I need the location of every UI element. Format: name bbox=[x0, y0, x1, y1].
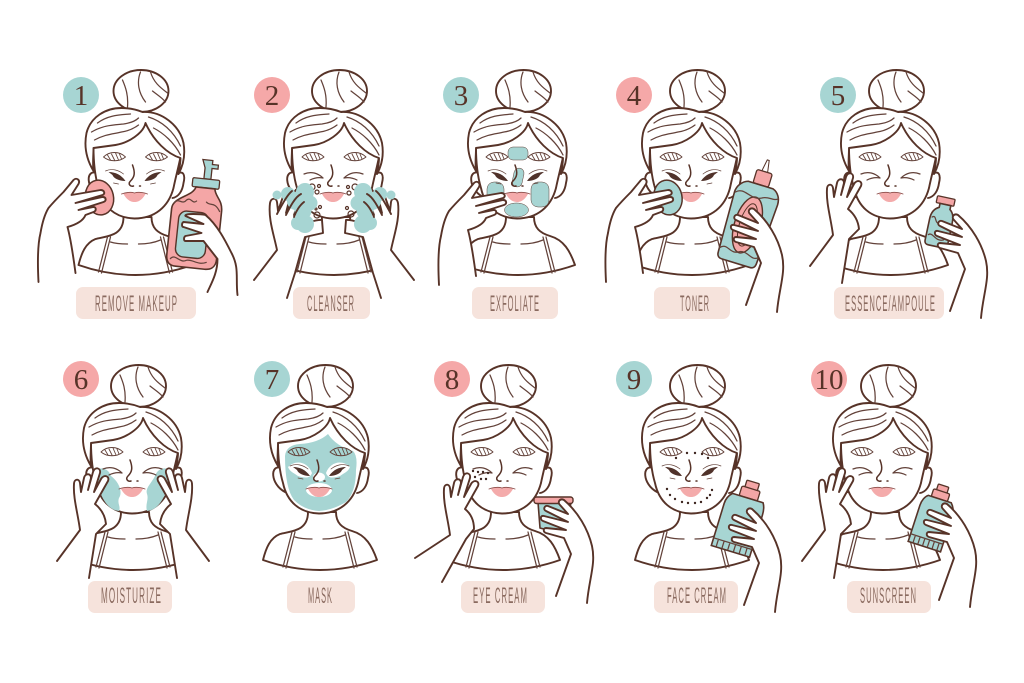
figure: woman applying moisturizer with both hands bbox=[57, 365, 209, 578]
number badge 1: 1 bbox=[74, 80, 88, 112]
step 10: sunscreen: SUNSCREEN bbox=[860, 583, 917, 608]
label: moisturize bbox=[88, 581, 172, 613]
number badge 6: 6 bbox=[74, 364, 88, 396]
label: sunscreen bbox=[847, 581, 931, 613]
step 3: exfoliate: EXFOLIATE bbox=[490, 291, 540, 316]
step 9: face cream: FACE CREAM bbox=[667, 583, 727, 608]
step 6: moisturize bbox=[57, 361, 209, 613]
label: toner: TONER bbox=[680, 291, 710, 316]
number badge 9 bbox=[616, 361, 652, 397]
number badge 5 bbox=[820, 77, 856, 113]
step 4: toner bbox=[605, 70, 789, 319]
figure: woman patting essence, small bottle bbox=[810, 70, 987, 318]
number badge 7 bbox=[254, 361, 290, 397]
number badge 4: 4 bbox=[627, 80, 642, 112]
number badge 8 bbox=[434, 361, 470, 397]
label: essence/ampoule bbox=[834, 287, 944, 319]
step 8: eye cream: EYE CREAM bbox=[473, 583, 528, 608]
step 5: essence / ampoule bbox=[810, 70, 987, 319]
label: face cream bbox=[654, 581, 738, 613]
step 10: sunscreen bbox=[802, 361, 976, 613]
label: cleanser bbox=[293, 287, 370, 319]
number badge 3 bbox=[443, 77, 479, 113]
label: remove makeup bbox=[76, 287, 196, 319]
number badge 1 bbox=[63, 77, 99, 113]
number badge 4 bbox=[616, 77, 652, 113]
figure: woman wearing teal sheet mask bbox=[263, 365, 377, 570]
step 9: face cream bbox=[616, 361, 781, 613]
step 1: remove makeup: REMOVE MAKEUP bbox=[95, 291, 178, 316]
number badge 5: 5 bbox=[831, 80, 845, 112]
step 2: cleanser bbox=[254, 70, 414, 319]
number badge 7: 7 bbox=[265, 364, 279, 396]
figure: woman washing with foam bbox=[254, 70, 414, 298]
number badge 2: 2 bbox=[265, 80, 279, 112]
figure: woman with dotted cream and bottle bbox=[635, 365, 781, 612]
label: mask bbox=[287, 581, 355, 613]
number badge 9: 9 bbox=[627, 364, 641, 396]
step 7: mask bbox=[254, 361, 377, 613]
number badge 6 bbox=[63, 361, 99, 397]
number badge 10: 10 bbox=[814, 364, 844, 396]
label: toner bbox=[654, 287, 730, 319]
figure: woman with toner pad and tall bottle bbox=[605, 70, 789, 312]
label: mask: MASK bbox=[308, 583, 333, 608]
label: exfoliate bbox=[472, 287, 558, 319]
number badge 3: 3 bbox=[454, 80, 468, 112]
label: eye cream bbox=[461, 581, 545, 613]
step 8: eye cream bbox=[415, 361, 593, 613]
step 3: exfoliate bbox=[438, 70, 575, 319]
figure: woman with exfoliating patches bbox=[438, 70, 575, 285]
figure: woman patting sunscreen, holding bottle bbox=[802, 365, 976, 607]
step 2: cleanser: CLEANSER bbox=[307, 291, 355, 316]
figure: woman with cleansing pad and pink bottle bbox=[38, 70, 238, 295]
step 6: moisturize: MOISTURIZE bbox=[101, 583, 162, 608]
number badge 8: 8 bbox=[445, 364, 459, 396]
number badge 2 bbox=[254, 77, 290, 113]
step 1: remove makeup bbox=[38, 70, 238, 319]
figure: woman dotting eye cream, holding jar bbox=[415, 365, 593, 603]
